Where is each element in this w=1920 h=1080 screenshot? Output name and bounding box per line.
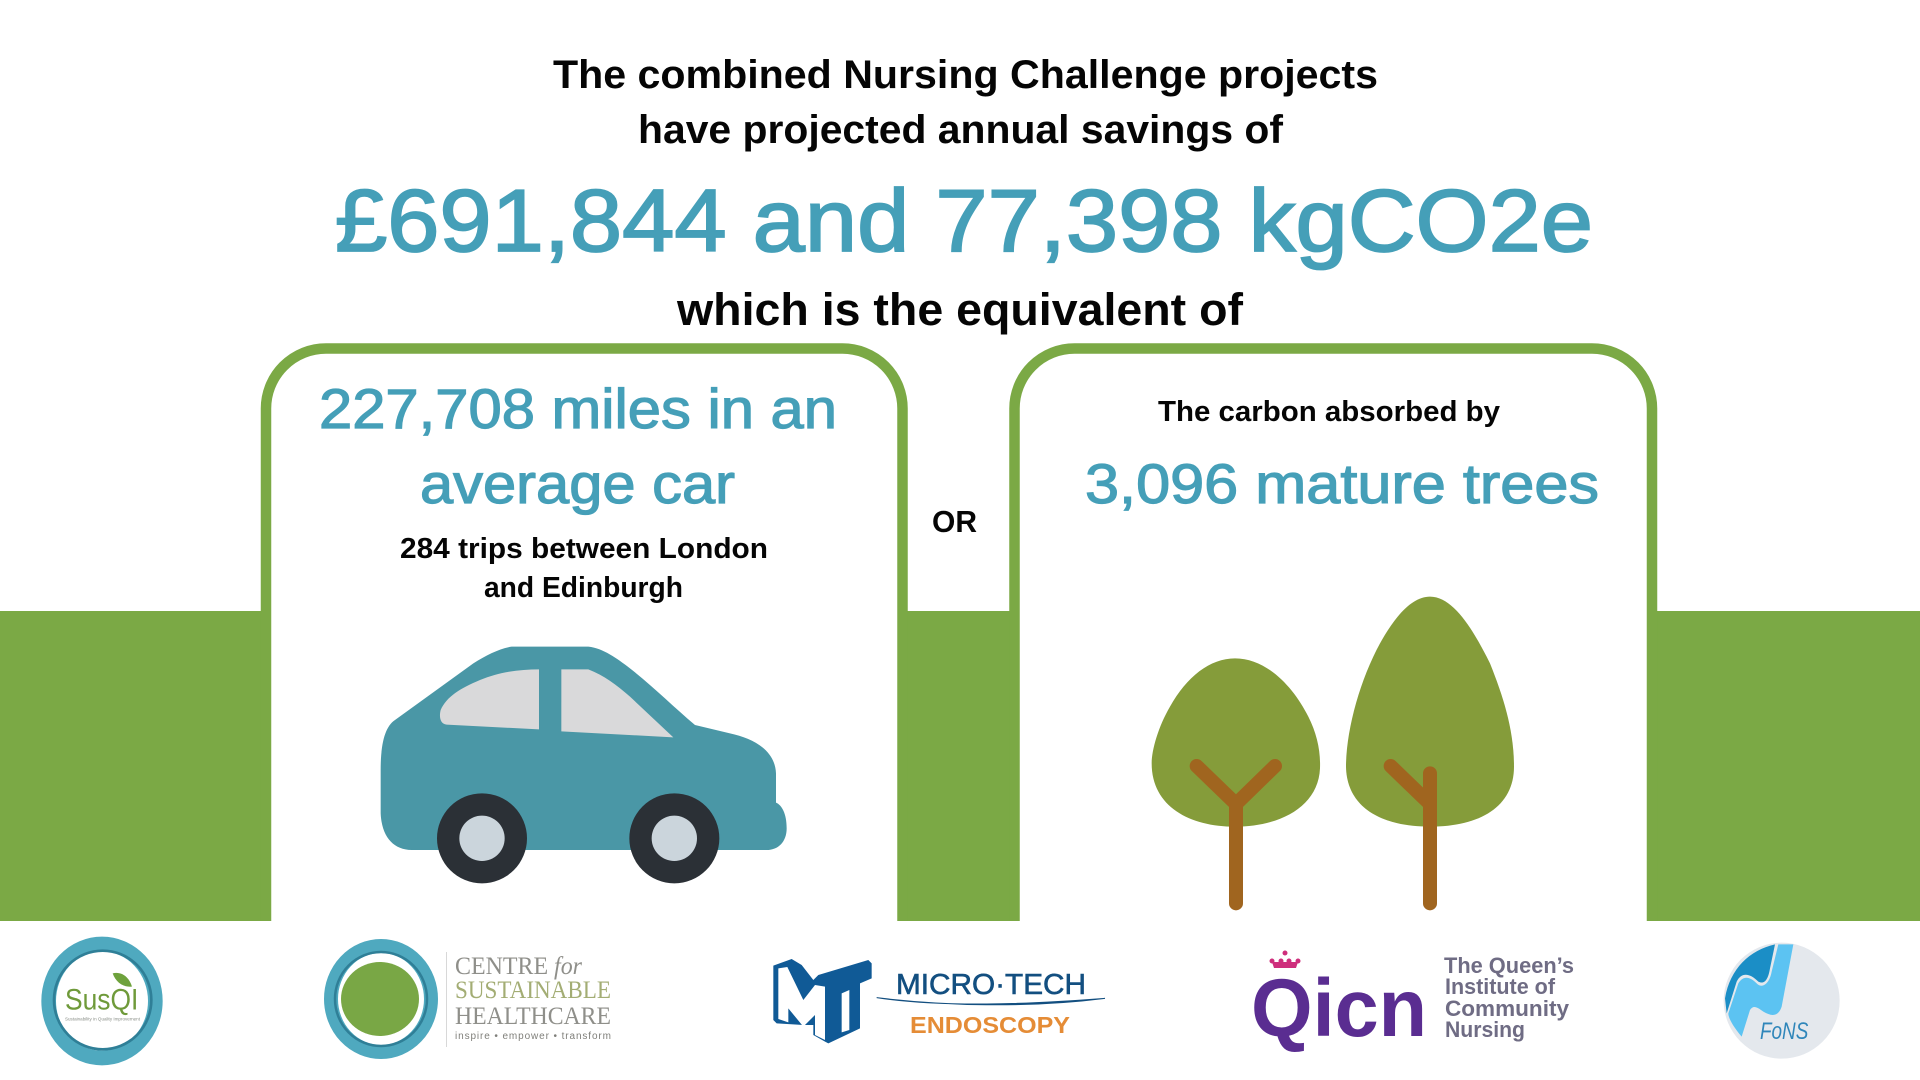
logo: Micro-Tech Endoscopy: MICRO·TECH — [896, 969, 1086, 1001]
icon: car — [381, 647, 787, 883]
logo: Queen's Institute of Community Nursing: Qicn — [1251, 963, 1427, 1054]
logo: Centre for Sustainable Healthcare: inspire • empower • transform — [455, 1031, 611, 1042]
logo: SusQI — [49, 944, 155, 1058]
logo: Centre for Sustainable Healthcare — [331, 946, 611, 1052]
car miles figure: 227,708 miles in an — [319, 377, 837, 440]
car trips note: 284 trips between London — [400, 533, 768, 565]
logo: Queen's Institute of Community Nursing — [1251, 950, 1574, 1054]
title: have projected annual savings of — [638, 108, 1284, 152]
car miles figure — [319, 377, 837, 515]
title: The combined Nursing Challenge projects — [553, 53, 1378, 97]
headline figures: £691,844 and 77,398 kgCO2e — [335, 171, 1593, 270]
logo: Micro-Tech Endoscopy — [773, 959, 1105, 1043]
tree figure: 3,096 mature trees — [1085, 452, 1599, 515]
green background band — [0, 611, 1920, 921]
logo: Micro-Tech Endoscopy: ENDOSCOPY — [910, 1012, 1070, 1038]
logo: Queen's Institute of Community Nursing: Institute of — [1445, 974, 1556, 999]
title — [553, 53, 1378, 152]
logo: SusQI: Sustainability in Quality Improvement — [65, 1017, 141, 1022]
logo: Queen's Institute of Community Nursing: Community — [1445, 996, 1570, 1021]
subheading: which is the equivalent of — [676, 284, 1244, 335]
logo: Centre for Sustainable Healthcare: HEALTHCARE — [455, 1003, 611, 1030]
car trips note: and Edinburgh — [484, 572, 683, 604]
logo: Queen's Institute of Community Nursing: The Queen’s — [1444, 953, 1574, 978]
tree intro text: The carbon absorbed by — [1158, 396, 1500, 428]
logo: Centre for Sustainable Healthcare: SUSTAINABLE — [455, 977, 611, 1004]
connector word: OR: OR — [932, 504, 977, 539]
logo: SusQI: SusQI — [65, 983, 138, 1016]
icon: trees — [1152, 597, 1514, 903]
panel: tree equivalent — [1014, 348, 1652, 921]
car trips note — [400, 533, 768, 604]
car miles figure: average car — [420, 452, 735, 515]
logo: Centre for Sustainable Healthcare: CENTRE for — [455, 953, 582, 980]
panel: car equivalent — [266, 348, 903, 921]
logo: FoNS — [1724, 943, 1840, 1059]
logo: FoNS: FoNS — [1760, 1018, 1808, 1045]
logo: Queen's Institute of Community Nursing: Nursing — [1445, 1017, 1525, 1042]
